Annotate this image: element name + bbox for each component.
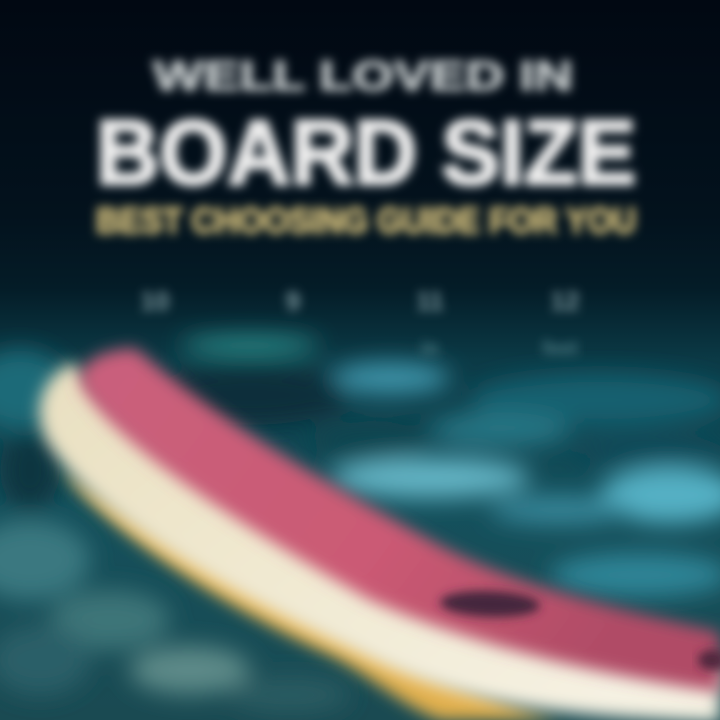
water texture	[0, 335, 720, 713]
board red deck	[80, 348, 720, 692]
label 4 sub: feet	[542, 338, 578, 360]
label 3 sub: in	[421, 338, 439, 360]
main heading: BOARD SIZE	[96, 102, 636, 204]
label 1: 10	[141, 286, 169, 316]
label 3: 11	[416, 286, 444, 316]
gold subtitle: BEST CHOOSING GUIDE FOR YOU	[96, 200, 636, 241]
board dark fitting	[698, 650, 720, 670]
board dark handle	[440, 589, 540, 619]
title block	[96, 52, 636, 241]
board cream rail	[39, 362, 720, 720]
board yellow underside	[60, 470, 560, 720]
board	[39, 348, 720, 720]
label 4: 12	[551, 286, 579, 316]
label 2: 9	[286, 286, 300, 316]
eyebrow line: WELL LOVED IN	[153, 52, 573, 99]
four column labels	[141, 286, 579, 360]
